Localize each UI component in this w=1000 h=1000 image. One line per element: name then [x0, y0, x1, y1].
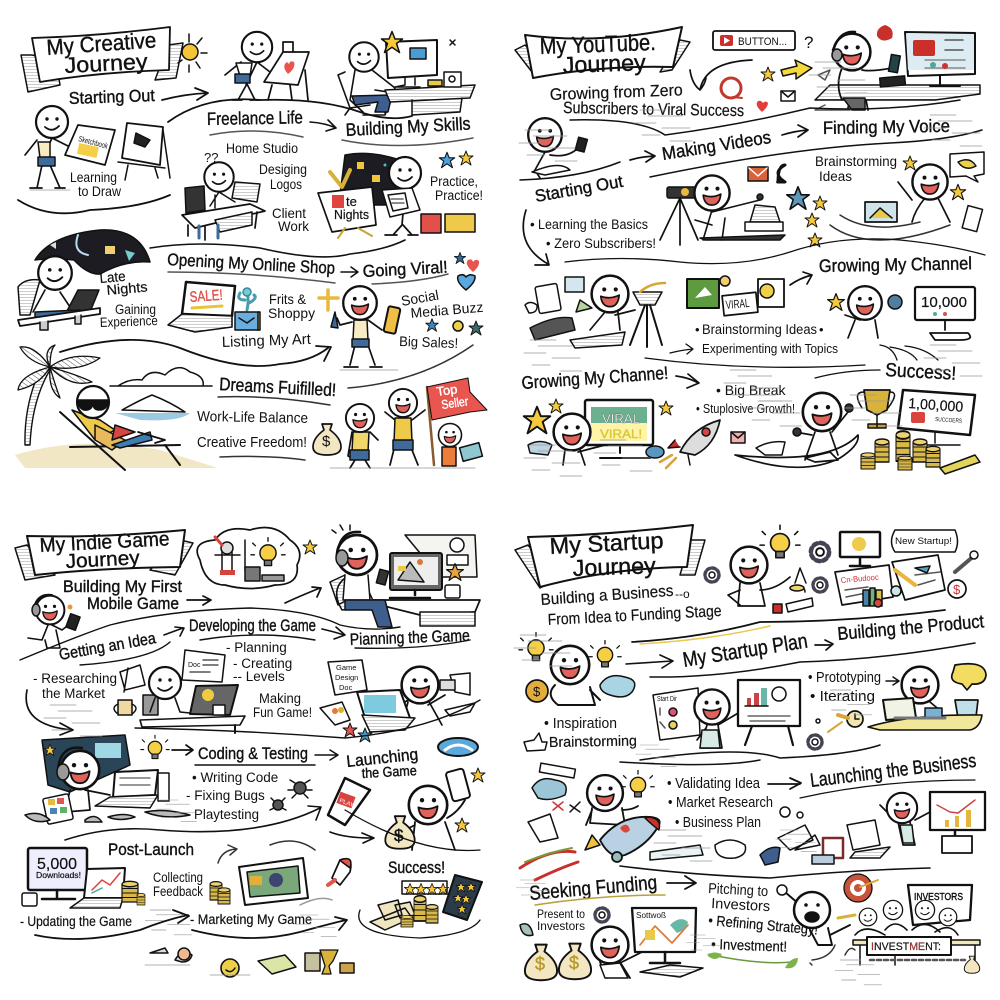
pitching figure — [777, 885, 855, 945]
text: Marketing My Game: - Marketing My Game — [190, 912, 312, 927]
book — [940, 455, 980, 474]
arrows — [187, 587, 321, 605]
text: Brainstorming Ideas — [815, 154, 897, 184]
idea cloud with knight — [197, 528, 300, 588]
title banner: My Creative — [46, 27, 157, 60]
money and coins pile — [359, 896, 480, 938]
arrow — [790, 272, 812, 285]
text: Home Studio list — [226, 140, 310, 234]
subtitle — [550, 81, 744, 120]
easel with drawing — [118, 123, 170, 180]
thumbnails cards — [687, 276, 784, 316]
text: Prototyping Iterating — [808, 670, 881, 705]
heading: Launching the Game: Launching — [346, 746, 419, 771]
arrow — [815, 640, 833, 650]
heading: Planning the Game: Pianning the Game — [350, 627, 470, 649]
phone with play: PLAY — [338, 798, 354, 809]
founder at workstation — [868, 664, 986, 730]
stick figure with bulbs — [519, 633, 635, 705]
wave paths — [620, 745, 880, 765]
text: Writing Code list: Playtesting — [194, 807, 259, 822]
tripod with basket — [630, 283, 665, 347]
sketchbook — [65, 125, 115, 165]
business documents: Cn-Budooc — [840, 573, 879, 585]
text: Dreams Fulfilled and balance — [197, 374, 337, 451]
icon: thumbs up — [524, 733, 547, 751]
text: Brainstorming Ideas list — [695, 322, 838, 356]
night sky blob with late-night worker — [18, 230, 150, 330]
icons: hearts and stars — [426, 252, 483, 335]
text: Updating the Game: - Updating the Game — [20, 914, 132, 929]
arrow — [162, 88, 208, 100]
arrow — [676, 374, 699, 388]
text: Late Nights Gaining Experience: Nights — [106, 278, 148, 298]
text: Planning list: - Creating — [233, 656, 292, 671]
stick figure with idea — [705, 525, 806, 606]
wave with arrow — [60, 340, 331, 366]
game design notebook and happy developer: Design — [335, 673, 358, 682]
stick figure with phone — [28, 595, 80, 648]
three friends with flag: Seller — [440, 394, 469, 412]
phone with play — [328, 778, 370, 825]
button graphic — [713, 31, 795, 50]
tablet with stars — [443, 875, 482, 920]
text: Planning list: -- Levels — [233, 669, 285, 684]
sign: Late Nights: Nights — [334, 207, 369, 222]
text: Collecting Feedback: Collecting — [153, 870, 203, 885]
investors board and panel: INVESTMENT: — [871, 941, 941, 953]
text: Dreams Fulfilled and balance: Dreams Fuifilled! — [219, 374, 337, 400]
text: Brainstorming Ideas list: Experimenting with Topics — [702, 341, 838, 356]
heading: Developing the Game: Developing the Game — [189, 617, 316, 635]
heading: Starting Out: Starting Out — [533, 172, 625, 206]
text: Frits and Shoppy, Listing My Art: Listing My Art — [222, 331, 312, 351]
trophy — [857, 390, 895, 428]
text: Frits and Shoppy, Listing My Art — [222, 291, 315, 351]
stick figure at streaming desk — [815, 25, 980, 110]
title banner — [15, 528, 193, 580]
text: Big Break and growth: • Stuplosive Growth! — [696, 402, 795, 416]
panel: My YouTube Journey — [515, 25, 985, 476]
text: Frits and Shoppy, Listing My Art: Shoppy — [268, 305, 315, 321]
text: Planning list: Making — [259, 691, 301, 706]
title banner: Journey — [572, 552, 657, 581]
wave arrow — [35, 910, 189, 939]
curved arrow — [26, 690, 73, 735]
icon: gear — [595, 908, 609, 922]
monitor: 5,000 downloads: 5,000 — [37, 856, 77, 873]
text: Inspiration Brainstorming: • Inspiration — [544, 716, 617, 732]
stick figure with sketchbook — [25, 106, 70, 190]
stick figure recording — [694, 175, 785, 240]
question mark: ? — [804, 33, 813, 52]
text: Practice, Practice — [430, 174, 483, 203]
game design notebook and happy developer: Game — [336, 663, 356, 672]
wave arrow — [192, 917, 347, 938]
wave lines — [565, 239, 985, 264]
blue night picture with developer — [25, 735, 190, 824]
heading: Building the Product: Building the Product — [837, 610, 985, 644]
laptop with chart — [70, 868, 145, 908]
text: Inspiration Brainstorming: Brainstorming — [549, 733, 637, 751]
wave path — [168, 99, 412, 122]
text: Home Studio list: Client — [272, 205, 306, 221]
heading: Going Viral: Going Viral! — [362, 258, 448, 281]
arrow — [886, 677, 899, 685]
chalkboard night scene — [330, 153, 400, 205]
chart board: Start Dir — [657, 696, 678, 703]
coins — [210, 882, 230, 904]
palm tree — [18, 345, 100, 445]
wave — [135, 700, 480, 738]
business documents — [835, 555, 945, 607]
text: Big Break and growth — [696, 382, 795, 416]
text: Learning to Draw — [70, 169, 122, 199]
game design notebook and happy developer: Doc — [339, 683, 353, 692]
thumbnails cards: VIRAL — [725, 296, 750, 312]
arrow — [310, 120, 336, 131]
laptop with SALE — [168, 282, 235, 332]
star — [303, 540, 317, 554]
stick figure with tablet — [528, 118, 587, 178]
stick figure with 10,000 monitor: 10,000 — [921, 294, 967, 311]
stick figure with viral monitor: VIRAL! — [600, 427, 642, 441]
text: refining and investment: • Investment! — [711, 937, 787, 956]
text: Brainstorming Ideas list: • — [819, 322, 824, 337]
text: Home Studio list: Desiging — [259, 161, 307, 177]
whiteboard with chart — [738, 680, 800, 745]
heading: Making Videos: Making Videos — [660, 127, 772, 164]
text: Big Break and growth: • Big Break — [716, 382, 786, 398]
arrow — [626, 655, 673, 668]
monitor: 1,00,000 subscribers: 1,00,000 — [908, 396, 964, 416]
bulb — [141, 735, 169, 758]
tripod camera — [660, 187, 698, 245]
icons: wrench, dollar, mail — [773, 551, 978, 613]
text: Learning to Draw: Learning — [70, 169, 117, 185]
wave paths — [632, 610, 945, 642]
stick figure at laptop with documents: Doc — [188, 662, 201, 669]
arrow — [667, 876, 696, 889]
text: refining and investment: • Refining Strategy! — [708, 913, 819, 939]
target icon — [844, 874, 878, 902]
text: Dreams Fulfilled and balance: Creative Freedom! — [197, 435, 307, 451]
arrow — [768, 778, 801, 789]
title banner: My Startup — [549, 527, 664, 559]
wave lines — [520, 100, 982, 180]
title banner: Journey — [65, 547, 140, 573]
stick figure practising — [382, 157, 421, 235]
icons: gears — [811, 543, 829, 592]
stick figure at home studio desk: ?? — [204, 150, 218, 165]
heading: Success: Success! — [885, 360, 957, 385]
text: Collecting Feedback — [153, 870, 203, 899]
title banner: My YouTube. — [539, 29, 656, 59]
text: Inspiration Brainstorming — [544, 716, 637, 751]
arrow and waves — [645, 344, 938, 367]
sign: Late Nights: te — [346, 194, 357, 209]
monitor: 5,000 downloads: Downloads! — [36, 870, 81, 880]
wave path — [620, 866, 930, 878]
heading: Building My Skills: Building My Skills — [345, 113, 471, 140]
title banner — [21, 27, 183, 92]
small doodles row — [650, 807, 890, 865]
text: Brainstorming Ideas: Brainstorming — [815, 154, 897, 169]
text: Researching the Market — [33, 671, 117, 701]
curved arrow — [690, 60, 752, 90]
rocket — [300, 859, 351, 905]
three friends with flag: Top — [435, 382, 458, 399]
arrow — [630, 151, 655, 162]
wave with node — [810, 945, 855, 965]
button graphic: BUTTON... — [738, 36, 787, 48]
scribble lines — [514, 635, 882, 985]
title banner: Journey — [64, 49, 148, 78]
heading: Freelance Life: Freelance Life — [207, 107, 303, 129]
cloud outline — [110, 368, 212, 386]
icons: mail moon stars — [748, 156, 917, 247]
leaf sprig — [520, 924, 798, 968]
heading: Building My First Mobile Game: Mobile Game — [87, 594, 179, 613]
text: Planning list: Fun Game! — [253, 705, 312, 720]
monitor and speech bubble — [840, 530, 958, 566]
icons: mail, comet — [731, 432, 785, 455]
subtitle: Growing from Zero — [550, 81, 683, 104]
text: refining and investment — [708, 913, 819, 956]
panel: My Creative Journey — [15, 27, 487, 470]
rocket — [660, 420, 720, 468]
three friends with flag: $ — [322, 433, 331, 450]
text: Researching the Market: the Market — [42, 686, 105, 701]
title banner: My Indie Game — [39, 528, 170, 557]
icons: wrench, dollar, mail: $ — [953, 582, 961, 597]
stick figure going viral — [319, 286, 401, 370]
icons: chat, mail, heart, yellow arrow — [721, 60, 812, 112]
text: Brainstorming Ideas: Ideas — [819, 169, 852, 184]
monitor: 1,00,000 subscribers — [898, 390, 975, 445]
stick figure presenting at software monitor: Sottwoß — [636, 911, 666, 920]
text: Frits and Shoppy, Listing My Art: Frits & — [269, 291, 307, 307]
text: Collecting Feedback: Feedback — [153, 884, 203, 899]
heading: Building My First Mobile Game — [63, 577, 182, 613]
text: Practice, Practice: Practice, — [430, 174, 478, 189]
title banner — [515, 525, 705, 588]
icons: bugs — [270, 780, 312, 810]
subtitle: From Idea to Funding Stage — [547, 603, 722, 629]
text: Researching the Market: - Researching — [33, 671, 117, 686]
text: Home Studio list: Work — [278, 218, 310, 234]
sign: Late Nights — [318, 187, 376, 238]
heading: Starting Out: Starting Out — [68, 86, 155, 108]
bracket arrow and list: Learning the Basics — [538, 217, 648, 232]
stick figure at home studio desk — [182, 150, 265, 240]
money bags: $ — [535, 954, 545, 974]
text: Pitching to Investors: Pitching to — [708, 881, 769, 900]
text: Social Media Buzz, Big Sales: Media Buzz — [410, 299, 484, 321]
stick figure presenting — [694, 689, 740, 748]
text: Present to Investors: Investors — [537, 919, 585, 933]
stick figure at easel — [225, 32, 309, 100]
text: Writing Code list — [186, 770, 278, 822]
launching founder with chart monitor — [880, 792, 985, 853]
heading: Launching the Game — [346, 746, 419, 781]
stick figure on rocket — [520, 771, 660, 880]
text: Prototyping Iterating: • Iterating — [810, 689, 875, 705]
bracket arrow and list: • Zero Subscribers! — [546, 236, 656, 251]
arrow — [164, 627, 184, 636]
stick figure with 10,000 monitor — [828, 286, 975, 340]
heading: Seeking Funding: Seeking Funding — [529, 872, 658, 905]
text: Late Nights Gaining Experience: Experience — [100, 313, 158, 330]
panel: My Indie Game Journey — [15, 525, 485, 977]
wave path — [18, 195, 170, 213]
island and sea — [115, 395, 190, 420]
title banner — [515, 27, 690, 78]
subtitle: Building a Business — [540, 583, 674, 609]
stick figure with money bag — [345, 768, 485, 850]
text: Pitching to Investors — [708, 881, 771, 915]
text: validating list: • Validating Idea — [667, 776, 761, 792]
stick figure with money bag: $ — [394, 826, 404, 845]
text: Late Nights Gaining Experience: Late — [99, 268, 126, 286]
heading: Launching the Game: the Game — [361, 762, 417, 781]
three friends with flag — [313, 378, 487, 468]
stick figure presenting at software monitor — [592, 908, 703, 978]
cloud and doodles — [528, 763, 580, 842]
text: Writing Code list: - Fixing Bugs — [186, 788, 265, 803]
wave path — [150, 240, 405, 257]
text: Social Media Buzz, Big Sales: Social — [400, 287, 440, 309]
heading: Building My First Mobile Game: Building My First — [63, 577, 182, 596]
bracket arrow and list — [523, 210, 656, 265]
suitcase and box — [421, 214, 475, 233]
heading: Getting an Idea: Getting an Idea — [58, 630, 157, 664]
arrow — [782, 125, 808, 137]
left work scene — [525, 276, 635, 348]
stars — [439, 151, 473, 168]
text: validating list: • Business Plan — [675, 815, 761, 831]
text: Present to Investors — [537, 907, 585, 933]
text: Brainstorming Ideas list: Brainstorming Ideas — [702, 322, 817, 337]
stick figure with bulbs: $ — [533, 684, 541, 699]
text: Brainstorming Ideas list: • — [695, 322, 700, 337]
heading: Opening My Online Shop: Opening My Online Shop — [167, 250, 336, 278]
subtitle: Subscribers to Viral Success — [563, 99, 744, 120]
wave with arrow — [65, 806, 374, 843]
subtitle: --o — [675, 587, 690, 601]
gear — [808, 735, 822, 749]
text: Writing Code list: • Writing Code — [192, 770, 278, 785]
sunbather on deck chair — [15, 386, 218, 470]
scribble lines — [44, 705, 336, 937]
money bags — [525, 944, 591, 980]
text: Social Media Buzz, Big Sales: Big Sales! — [399, 333, 458, 351]
text: Home Studio list: Logos — [270, 176, 302, 192]
monitor: 1,00,000 subscribers: SUCCOERS — [935, 417, 962, 425]
stick figure at monitor — [330, 525, 480, 627]
text: Social Media Buzz, Big Sales — [399, 287, 484, 351]
heading: My Startup Plan: My Startup Plan — [681, 630, 809, 672]
title banner: Journey — [562, 49, 647, 78]
text: Pitching to Investors: Investors — [711, 896, 771, 915]
bottom doodles — [145, 948, 354, 977]
monitor: 5,000 downloads — [22, 848, 87, 906]
arrow up and ornaments — [218, 841, 315, 863]
panel: My Startup Journey — [514, 525, 986, 985]
subtitle — [540, 583, 722, 629]
investors board and panel — [853, 885, 980, 973]
wave paths — [20, 608, 470, 665]
bracket arrow and list: • — [530, 217, 535, 232]
text: Practice, Practice: Practice! — [435, 188, 483, 203]
blue sky badge — [438, 738, 478, 756]
text: Planning list — [226, 640, 312, 720]
text: validating list: • Market Research — [668, 795, 773, 811]
investors board and panel: INVESTORS — [914, 891, 963, 903]
heading: Post-Launch: Post-Launch — [108, 840, 194, 859]
stick figure brainstorming — [830, 152, 984, 240]
stick figure with viral monitor — [524, 399, 673, 465]
clock icon — [816, 711, 863, 732]
game design notebook and happy developer — [320, 660, 475, 742]
text: Late Nights Gaining Experience — [99, 268, 158, 330]
laptop with SALE: SALE! — [189, 287, 223, 306]
monitor and speech bubble: New Startup! — [895, 536, 952, 547]
text: Dreams Fulfilled and balance: Work-Life Balance — [197, 409, 308, 427]
arrow — [322, 627, 345, 639]
money bags: $ — [569, 953, 579, 973]
text: Learning to Draw: to Draw — [78, 183, 122, 199]
heading: Finding My Voice: Finding My Voice — [823, 116, 950, 138]
text: Present to Investors: Present to — [537, 907, 585, 921]
text: Planning list: - Planning — [226, 640, 287, 655]
heading: Growing My Channel: Growing My Channel — [819, 253, 972, 276]
stick figure with viral monitor: VIRAL — [602, 411, 640, 426]
icon: sun — [178, 34, 207, 72]
stick figure on surfboard — [735, 393, 858, 467]
arrow — [341, 267, 358, 277]
coins pile — [861, 431, 940, 470]
text: Late Nights Gaining Experience: Gaining — [115, 302, 156, 317]
chart board — [653, 688, 700, 740]
arrow — [172, 745, 193, 755]
scribble lines — [519, 62, 982, 476]
arrow — [195, 750, 338, 765]
text: Home Studio list: Home Studio — [226, 140, 298, 156]
text: Prototyping Iterating: • Prototyping — [808, 670, 881, 686]
stick figure at laptop with documents — [114, 650, 245, 733]
framed game screen — [239, 858, 308, 905]
stick figure at desk with computer — [338, 32, 475, 115]
sketchbook: Sketchbook — [77, 134, 109, 151]
heading: Growing My Channel second: Growing My Channe! — [521, 363, 669, 393]
text: validating list — [667, 776, 773, 831]
heading: Success: Success! — [388, 858, 445, 877]
rating stars — [402, 881, 449, 895]
heading: Coding and Testing: Coding & Testing — [198, 744, 308, 763]
plant and mail box — [235, 288, 260, 330]
